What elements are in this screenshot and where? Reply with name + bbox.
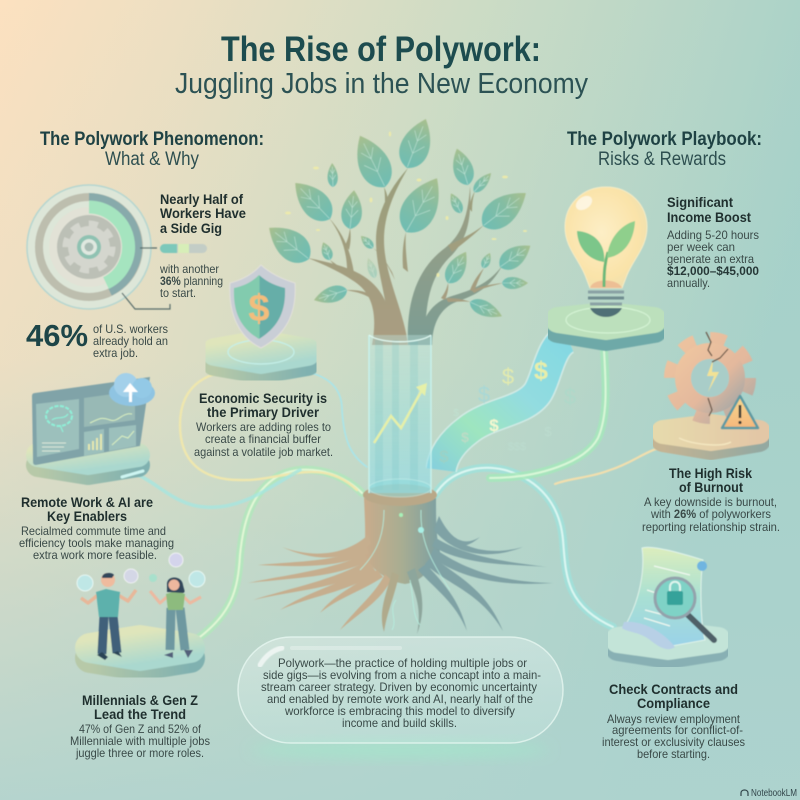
branches [308, 168, 503, 345]
text: 36 percent: with another [159, 262, 219, 276]
stat: 46 percent: already hold an [93, 334, 168, 348]
text: remote work: Recialmed commute time and [21, 524, 166, 538]
text: millennials: Millennials & Gen Z [82, 692, 198, 708]
summary text: stream career strategy. Driven by economic uncertainty [261, 680, 537, 694]
text: contracts: interest or exclusivity clauses [602, 735, 745, 749]
icon: shield on platform: $ [248, 288, 270, 330]
text: income boost: generate an extra [667, 252, 754, 266]
leaves [260, 114, 536, 323]
text: remote work: extra work more feasible. [33, 548, 157, 562]
summary pill [238, 637, 563, 758]
dollar signs: $$$ [508, 441, 526, 453]
title [175, 30, 588, 100]
text: remote work: efficiency tools make managing [19, 536, 174, 550]
text: remote work: Remote Work & AI are [21, 494, 153, 510]
icon: donut chart with gear [27, 185, 170, 309]
summary text: workforce is embracing this model to diversify [284, 704, 515, 718]
text: burnout: with 26% of polyworkers [650, 507, 771, 521]
text: economic security: create a financial buffer [205, 432, 321, 446]
text: nearly half: Workers Have [160, 205, 246, 221]
text: contracts: Check Contracts and [609, 681, 738, 697]
text: contracts [602, 681, 745, 761]
panel: risks and rewards [558, 129, 780, 761]
text: burnout: of Burnout [679, 479, 743, 495]
text: millennials [70, 692, 210, 760]
text: burnout: A key downside is burnout, [644, 495, 777, 509]
person: man [81, 573, 136, 660]
text: 36 percent [159, 262, 223, 300]
floating sparks [285, 132, 527, 277]
tree roots [248, 498, 553, 634]
icon: AI dashboard with cloud [32, 373, 155, 477]
dollar signs: $ [478, 382, 490, 407]
text: economic security: the Primary Driver [207, 404, 319, 420]
magnifier [655, 578, 714, 640]
stat: 46 percent: extra job. [93, 346, 138, 360]
text: contracts: before starting. [637, 747, 710, 761]
text: remote work [19, 494, 174, 562]
dollar signs [439, 357, 576, 466]
text: millennials: Millenniale with multiple jobs [70, 734, 210, 748]
text: income boost: Income Boost [667, 209, 751, 225]
text: economic security: Workers are adding roles to [196, 420, 331, 434]
panel: what and why [19, 129, 333, 760]
text: burnout [642, 465, 780, 534]
heading: polywork playbook: The Polywork Playbook: [567, 129, 762, 150]
dollar signs: $ [453, 408, 459, 419]
summary text [261, 656, 541, 730]
text: economic security: Economic Security is [199, 390, 327, 406]
text: remote work: Key Enablers [47, 508, 127, 524]
text: contracts: agreements for conflict-of- [612, 723, 743, 737]
icon: lightbulb with sprout [558, 187, 654, 337]
progress pill [160, 244, 207, 253]
person: woman [150, 578, 201, 658]
heading: polywork phenomenon: What & Why [105, 149, 199, 170]
heading: polywork phenomenon [40, 129, 264, 170]
stat: 46 percent: of U.S. workers [93, 322, 168, 336]
brain [46, 406, 72, 426]
summary text: Polywork—the practice of holding multiple jobs or [278, 656, 527, 670]
connector lines [133, 350, 670, 642]
title: The Rise of Polywork: [221, 30, 541, 69]
icon: shield on platform [215, 265, 307, 370]
text: burnout: reporting relationship strain. [642, 520, 780, 534]
dollar signs: $ [461, 429, 469, 445]
text: income boost: $12,000–$45,000 [667, 264, 759, 278]
text: 36 percent: 36% planning [160, 274, 223, 288]
dollar signs: $ [544, 424, 552, 439]
text: millennials: juggle three or more roles. [75, 746, 204, 760]
text: nearly half [160, 191, 246, 236]
text: nearly half: a Side Gig [160, 220, 222, 236]
tree: branches and leaves [260, 114, 536, 345]
trend arrow [374, 388, 423, 443]
text: income boost [667, 194, 759, 290]
text: economic security: against a volatile job market. [194, 445, 333, 459]
text: income boost: annually. [667, 276, 710, 290]
stat: 46 percent: 46% [26, 318, 88, 353]
dollar signs: $ [489, 416, 499, 435]
dollar signs: $ [502, 364, 514, 389]
heading: polywork playbook [567, 129, 762, 170]
icon: contract scroll with magnifier [618, 547, 718, 656]
text: nearly half: Nearly Half of [160, 191, 243, 207]
text: contracts: Always review employment [607, 712, 741, 726]
text: burnout: The High Risk [669, 465, 752, 481]
bubbles [77, 553, 205, 591]
summary text: income and build skills. [342, 716, 457, 730]
cloud [109, 373, 155, 406]
icon: two people juggling on platform [77, 553, 205, 666]
summary text: side gigs—is evolving from a niche concapt into a main- [263, 668, 541, 682]
dollar signs: $ [564, 384, 576, 409]
money ribbon [439, 338, 576, 470]
dollar signs: $ [439, 447, 449, 466]
glass cylinder with rising chart [363, 335, 437, 506]
text: millennials: 47% of Gen Z and 52% of [79, 722, 202, 736]
text: millennials: Lead the Trend [94, 706, 186, 722]
icon: cracked gear with warning [663, 332, 759, 448]
heading: polywork playbook: Risks & Rewards [598, 149, 726, 170]
text: 36 percent: to start. [160, 286, 196, 300]
text: contracts: Compliance [637, 695, 710, 711]
text: income boost: Adding 5-20 hours [667, 228, 759, 242]
warning triangle [722, 396, 758, 428]
stat: 46 percent [26, 318, 168, 360]
summary text: and enabled by remote work and AI, nearly half of the [267, 692, 533, 706]
text: income boost: Significant [667, 194, 733, 210]
heading: polywork phenomenon: The Polywork Phenomenon: [40, 129, 264, 150]
text: income boost: per week can [667, 240, 735, 254]
title: Juggling Jobs in the New Economy [175, 68, 588, 100]
text: economic security [194, 390, 333, 459]
dollar signs: $ [534, 357, 548, 385]
